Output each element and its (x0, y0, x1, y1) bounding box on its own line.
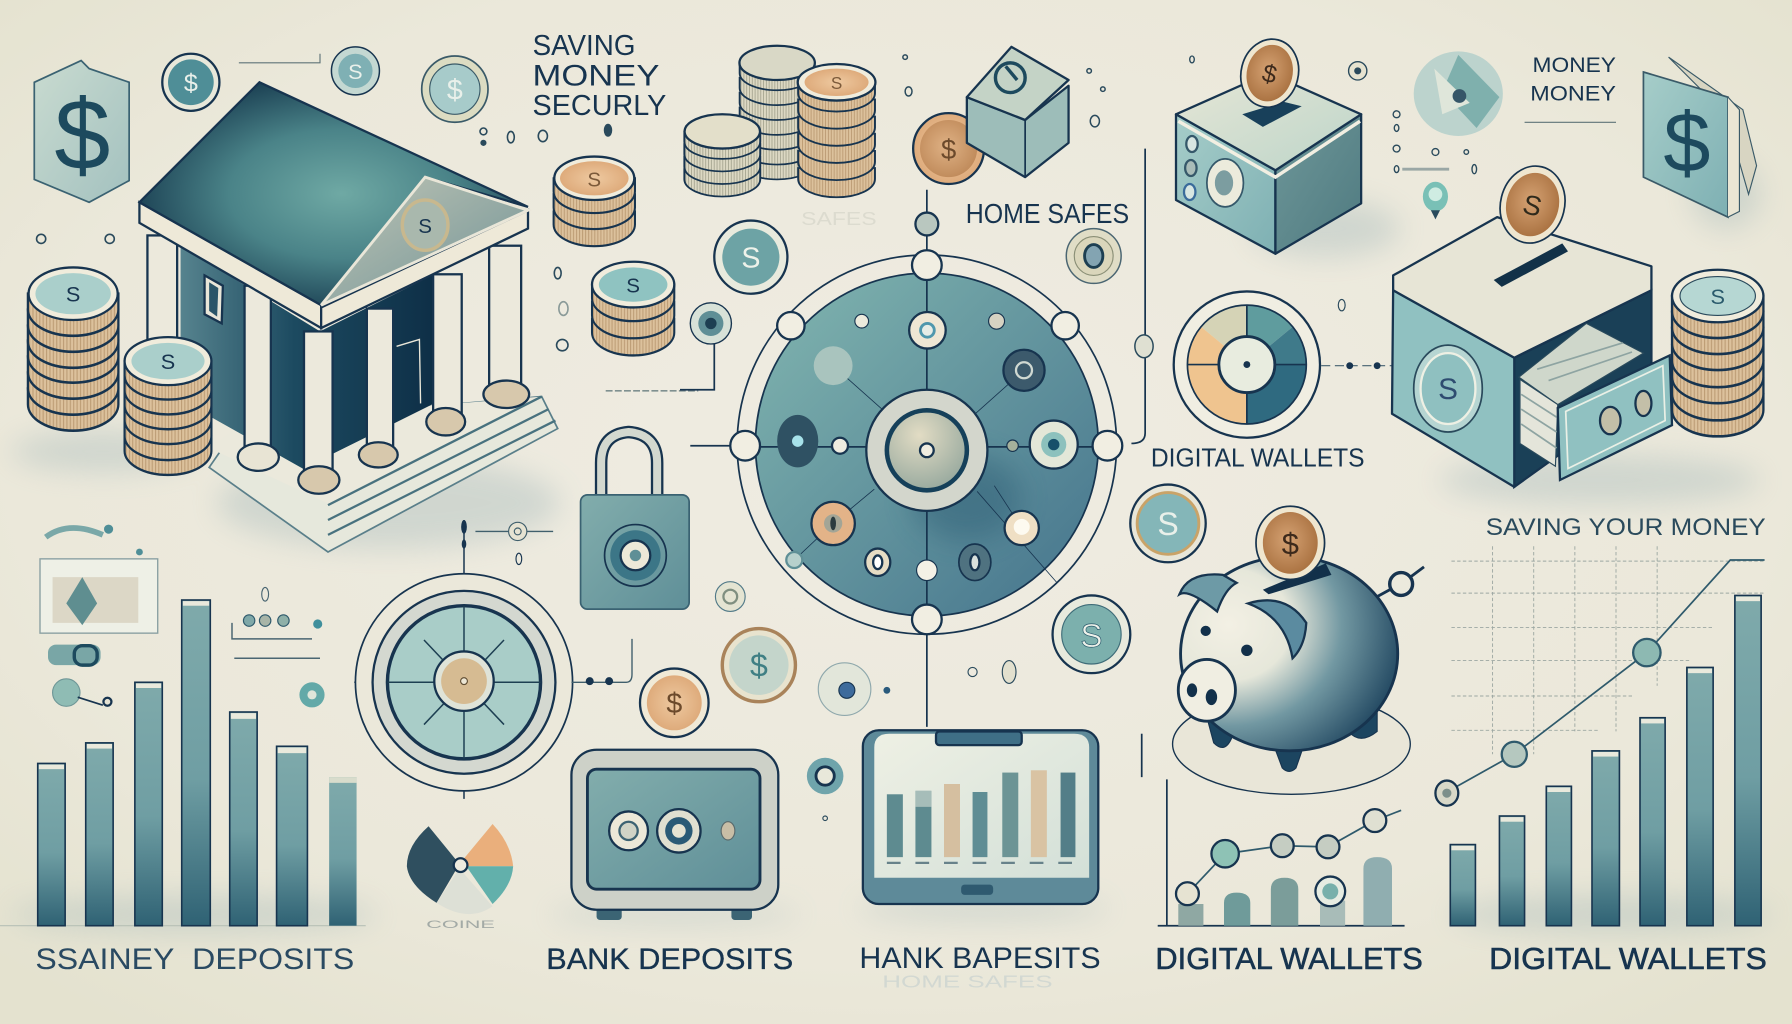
front medallion: S (1438, 373, 1458, 406)
dial top node (461, 520, 553, 565)
left face (1392, 290, 1514, 487)
target with connector (680, 303, 731, 390)
bottom labels: SSAINEY DEPOSITS (35, 943, 354, 976)
center dial (866, 390, 987, 511)
coin: copper (913, 113, 984, 184)
text: money money: MONEY (1530, 81, 1616, 106)
top row coins: $ (184, 69, 198, 97)
text: saving your money: SAVING YOUR MONEY (1486, 514, 1766, 541)
icon: small top safe (967, 47, 1069, 177)
line chart grid (1451, 546, 1765, 754)
text: money money (1525, 52, 1616, 122)
bottom labels: DIGITAL WALLETS (1489, 941, 1767, 976)
falling coin: S (1520, 188, 1545, 223)
bottom labels (35, 941, 1767, 976)
right opening (1514, 290, 1651, 487)
coin: copper dollar (640, 669, 709, 737)
bank columns (238, 246, 529, 494)
bank wall (181, 246, 434, 469)
coin stack: left large: S (66, 282, 80, 307)
coin stack: orange right (798, 64, 875, 197)
coin stack: teal top: S (626, 275, 640, 298)
coin stack: tall grey (739, 46, 815, 179)
icon: dollar shield (34, 61, 129, 202)
tablet with bar chart (863, 730, 1098, 904)
donut pie chart (1174, 291, 1320, 438)
coin stack: orange top: S (587, 168, 601, 191)
coin stack: right: S (1710, 284, 1725, 309)
icon: wall safe (571, 750, 778, 920)
scattered top dots (903, 55, 1153, 443)
faint label: HOME SAFES (882, 971, 1053, 991)
pig coin: $ (1282, 526, 1299, 561)
pig tail (1377, 567, 1424, 597)
small dots near title (37, 125, 698, 391)
coin: teal upper: S (741, 242, 760, 274)
soft ground shadows (11, 160, 1771, 933)
title: saving money securely: SECURLY (533, 90, 666, 122)
icon: dollar wallet: $ (1663, 94, 1710, 189)
faint coin label: COINE (426, 919, 496, 931)
icon: coin box top (1176, 33, 1361, 254)
bank roof (139, 82, 528, 328)
bottom labels: DIGITAL WALLETS (1155, 941, 1423, 976)
connector dots (1321, 299, 1392, 369)
falling coin (1234, 33, 1306, 113)
coin: small target (715, 582, 745, 611)
pig ears (1179, 574, 1306, 658)
coin: copper dollar: $ (666, 688, 682, 720)
box lid (1393, 217, 1651, 358)
front medallion (1414, 345, 1482, 432)
combination dial (354, 520, 573, 799)
icon: large coin box with drawer (1392, 159, 1672, 487)
coin: teal gold dollar: $ (750, 648, 768, 684)
fragment: pill and lens (48, 645, 111, 706)
pig slot (1263, 563, 1331, 594)
bottom labels: BANK DEPOSITS (546, 943, 793, 976)
cash stack (1519, 323, 1643, 466)
coin stack: left large (28, 267, 118, 431)
faint safes text: SAFES (801, 208, 877, 229)
icon: padlock (581, 432, 689, 609)
pig base (1173, 694, 1410, 794)
top row coins: $ (447, 74, 463, 106)
right trend line (1435, 560, 1765, 806)
illustration: piggy bank (1173, 506, 1424, 794)
fragment: small legend (232, 587, 325, 707)
text: money money: MONEY (1533, 52, 1616, 77)
left bar chart (0, 600, 366, 926)
inner nodes (777, 312, 1078, 581)
coin: teal upper (714, 221, 787, 294)
small pie chart (407, 824, 513, 914)
top row coins (162, 47, 488, 122)
bank roof: S (418, 215, 432, 238)
pig coin (1256, 506, 1325, 579)
coin stack: right (1672, 270, 1763, 436)
small orbit and dots (1190, 56, 1477, 174)
pig legs (1205, 697, 1377, 771)
central vault disc (690, 190, 1122, 634)
lid slot (1494, 243, 1568, 287)
coin: teal lower: S (1080, 618, 1102, 655)
icon: glass ball (1414, 51, 1503, 136)
icon: dollar wallet (1643, 57, 1757, 217)
outer ring and disc (690, 190, 1117, 634)
pig snout (1178, 659, 1235, 721)
bottom labels: HANK BAPESITS (859, 942, 1101, 975)
open drawer (1558, 355, 1672, 480)
coin stack: left front (125, 337, 211, 475)
coin: teal lower (1053, 595, 1130, 673)
label: digital wallets small: DIGITAL WALLETS (1151, 442, 1365, 472)
icons around tablet (807, 634, 1016, 821)
title: saving money securely: MONEY (533, 60, 660, 93)
label: home safes: HOME SAFES (966, 198, 1129, 229)
coin stack: teal top (592, 262, 674, 355)
falling coin (1492, 159, 1573, 250)
title: saving money securely: SAVING (533, 30, 635, 62)
icon: dollar shield: $ (54, 79, 110, 191)
right bar chart (1450, 595, 1761, 926)
coin stack: orange right: S (831, 73, 842, 93)
pig eyes (1201, 626, 1253, 656)
back left column (147, 235, 177, 350)
top row coins: S (348, 59, 363, 84)
icon: map pin (1423, 182, 1448, 219)
coin: teal gold ring: S (1157, 506, 1179, 542)
bank steps (209, 397, 558, 552)
small line and bar chart (1142, 734, 1405, 926)
falling coin: $ (1259, 59, 1280, 90)
dial connector (571, 639, 632, 685)
target coin beside home safes (1066, 229, 1121, 283)
ring nodes (730, 213, 1122, 634)
label panel fragment: left image (40, 525, 158, 633)
title: saving money securely (533, 30, 666, 122)
coin: copper: $ (941, 134, 956, 165)
pig body (1181, 557, 1398, 751)
coin stack: orange top (554, 157, 635, 246)
coin: teal gold dollar (722, 629, 795, 702)
coin stack: cream front (684, 114, 760, 197)
coin stack: left front: S (161, 349, 175, 374)
illustration: bank building (139, 82, 558, 552)
coin: teal gold ring (1130, 485, 1206, 562)
